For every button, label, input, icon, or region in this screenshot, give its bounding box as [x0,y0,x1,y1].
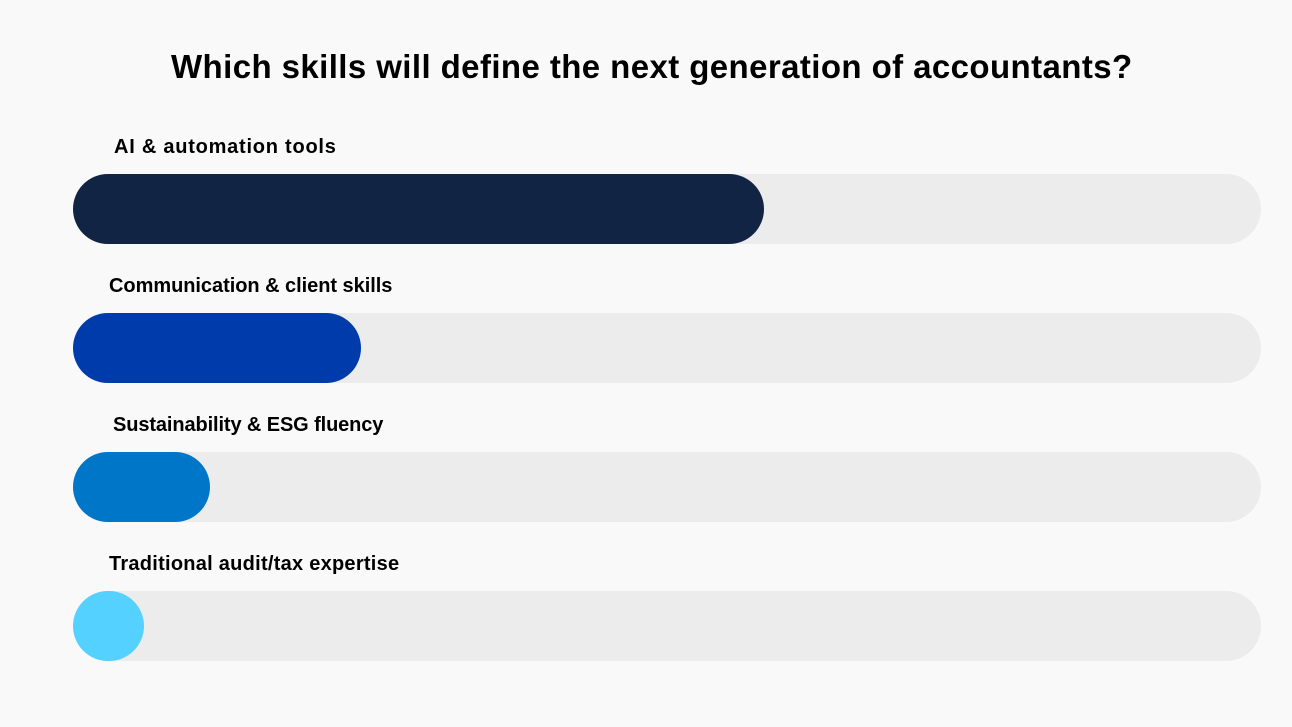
label: Sustainability & ESG fluency: Sustainability & ESG fluency [113,414,383,436]
label: Communication & client skills: Communication & client skills [109,275,392,297]
bar: Sustainability & ESG fluency [73,452,1261,522]
bar fill: Sustainability & ESG fluency [73,452,210,522]
bar fill: AI & automation tools [73,174,764,244]
bar: AI & automation tools [73,174,1261,244]
bar: Communication & client skills [73,312,1261,383]
label: Traditional audit/tax expertise: Traditional audit/tax expertise [109,553,399,575]
label: AI & automation tools: AI & automation tools [114,136,337,158]
bar fill: Communication & client skills [73,312,361,383]
bar fill: Traditional audit/tax expertise [73,590,144,661]
bar: Traditional audit/tax expertise [73,590,1261,661]
title: Which skills will define the next generation of accountants? [171,48,1133,85]
